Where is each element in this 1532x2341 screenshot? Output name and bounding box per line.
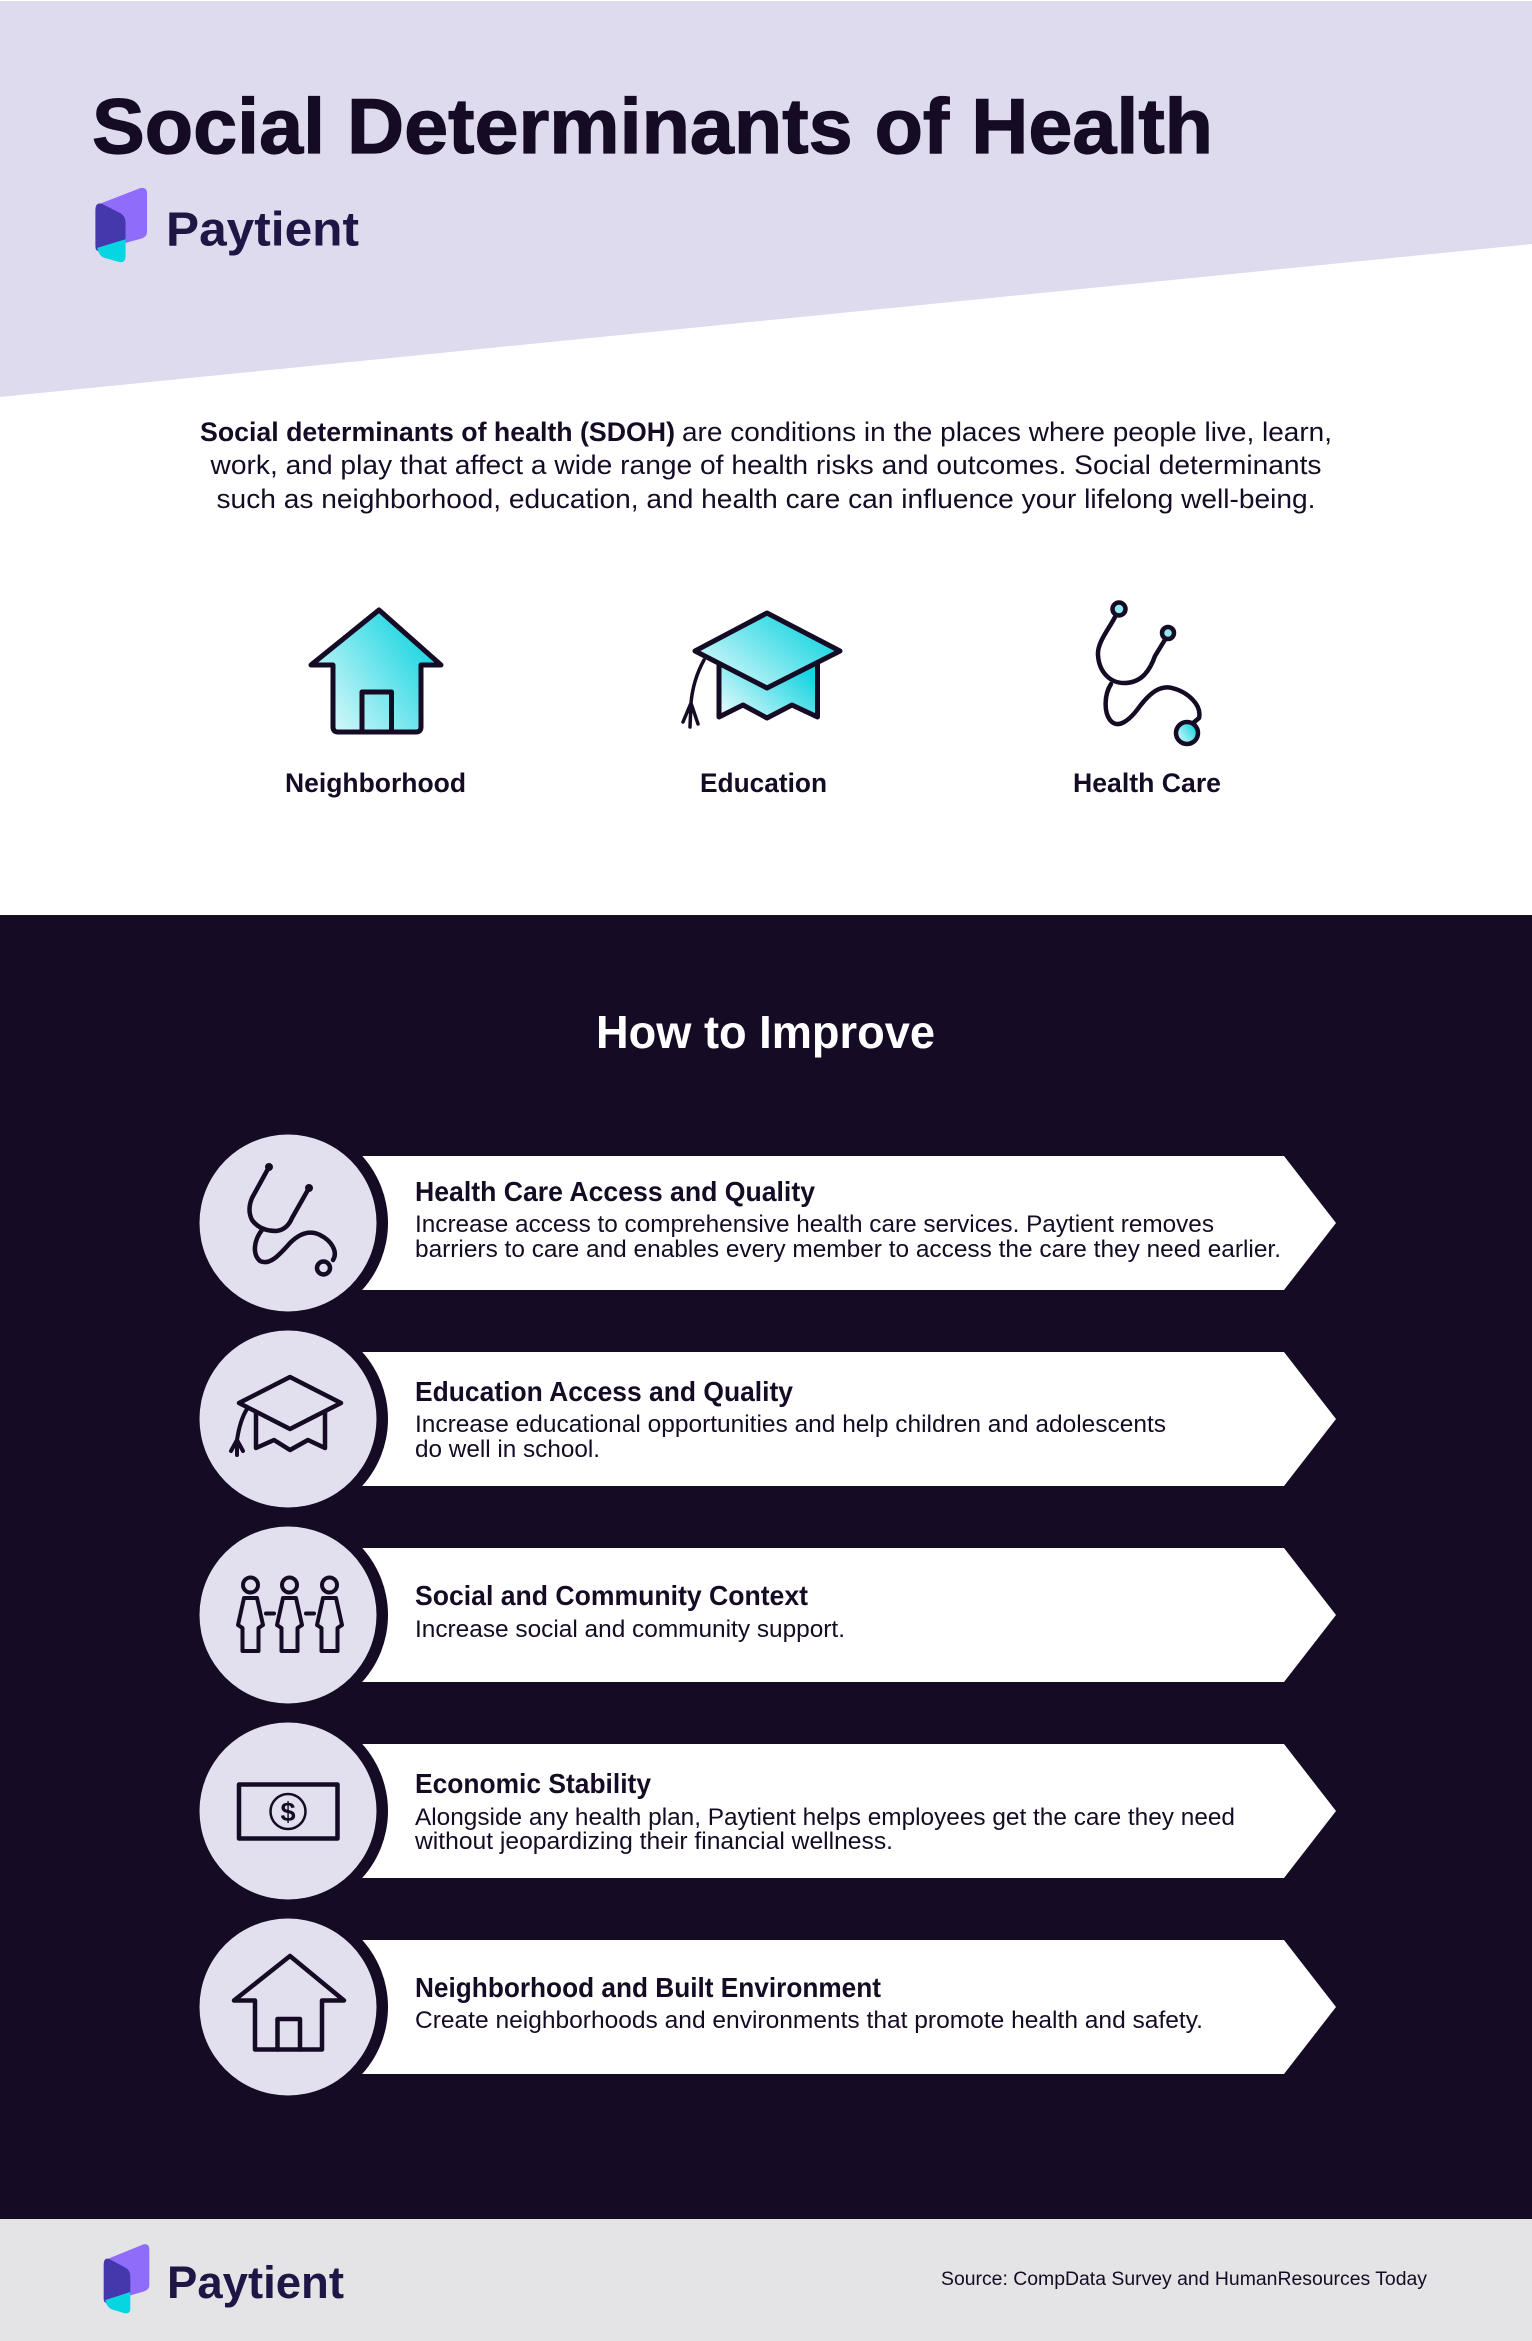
header band bbox=[0, 1, 1532, 397]
icon: three people bbox=[238, 1578, 342, 1651]
arrow banner bbox=[340, 1940, 1336, 2074]
row text: Create neighborhoods and environments that promote health and safety. bbox=[415, 2007, 1203, 2034]
row: economic stability bbox=[188, 1711, 1336, 1911]
icon circle bbox=[200, 1134, 376, 1312]
row text: Increase access to comprehensive health care services. Paytient removes bbox=[415, 1211, 1214, 1238]
icon: house bbox=[311, 610, 441, 732]
logo wordmark: Paytient bbox=[166, 204, 359, 256]
row heading: Social and Community Context bbox=[415, 1580, 808, 1611]
row text: do well in school. bbox=[415, 1436, 600, 1463]
label: Education bbox=[700, 768, 827, 798]
footer bbox=[0, 2219, 1532, 2341]
category: neighborhood bbox=[285, 610, 466, 798]
footer background bbox=[0, 2219, 1532, 2341]
logo wordmark: Paytient bbox=[167, 2257, 344, 2308]
category: education bbox=[683, 613, 840, 798]
title: Social Determinants of Health bbox=[92, 82, 1213, 170]
header logo bbox=[95, 188, 359, 262]
panel: how to improve bbox=[0, 915, 1532, 2219]
category: health care bbox=[1073, 602, 1221, 798]
row text bbox=[415, 1211, 1281, 1263]
ring bbox=[188, 1123, 388, 1323]
row text: without jeopardizing their financial wellness. bbox=[414, 1828, 893, 1855]
row text: barriers to care and enables every member to access the care they need earlier. bbox=[415, 1236, 1281, 1263]
icon: logo mark bbox=[104, 2244, 149, 2313]
intro paragraph bbox=[200, 417, 1332, 514]
row text: Increase social and community support. bbox=[415, 1616, 845, 1643]
intro paragraph: Social determinants of health (SDOH) bbox=[200, 417, 675, 447]
row heading: Health Care Access and Quality bbox=[415, 1176, 815, 1207]
icon circle bbox=[200, 1526, 376, 1704]
row text bbox=[415, 1411, 1166, 1463]
intro paragraph: are conditions in the places where people live, learn, bbox=[682, 417, 1332, 447]
row text: Alongside any health plan, Paytient helps employees get the care they need bbox=[415, 1804, 1235, 1831]
label: Neighborhood bbox=[285, 768, 466, 798]
source note: Source: CompData Survey and HumanResources Today bbox=[941, 2269, 1428, 2290]
icon circle bbox=[200, 1918, 376, 2096]
ring bbox=[188, 1515, 388, 1715]
icon circle bbox=[200, 1330, 376, 1508]
row heading: Education Access and Quality bbox=[415, 1376, 793, 1407]
row: social and community bbox=[188, 1515, 1336, 1715]
row heading: Neighborhood and Built Environment bbox=[415, 1972, 881, 2003]
row text: Increase educational opportunities and help children and adolescents bbox=[415, 1411, 1166, 1438]
row: neighborhood and built environment bbox=[188, 1907, 1336, 2107]
icon: graduation cap bbox=[683, 613, 840, 727]
ring bbox=[188, 1319, 388, 1519]
row: education access bbox=[188, 1319, 1336, 1519]
arrow banner bbox=[340, 1156, 1336, 1290]
ring bbox=[188, 1907, 388, 2107]
arrow banner bbox=[340, 1352, 1336, 1486]
icon: dollar bill bbox=[239, 1784, 338, 1838]
panel background bbox=[0, 915, 1532, 2219]
row: health care access bbox=[188, 1123, 1336, 1323]
arrow banner bbox=[340, 1744, 1336, 1878]
ring bbox=[188, 1711, 388, 1911]
icon: stethoscope bbox=[1098, 602, 1199, 744]
icon: stethoscope bbox=[250, 1163, 335, 1274]
icon circle bbox=[200, 1722, 376, 1900]
heading: How to Improve bbox=[596, 1006, 935, 1058]
icon: graduation cap bbox=[231, 1377, 341, 1455]
arrow banner bbox=[340, 1548, 1336, 1682]
intro paragraph: work, and play that affect a wide range of health risks and outcomes. Social determinants bbox=[209, 450, 1321, 480]
label: Health Care bbox=[1073, 768, 1221, 798]
icon: dollar bill: $ bbox=[280, 1797, 296, 1827]
icon: house bbox=[234, 1956, 344, 2050]
icon: logo mark bbox=[95, 188, 147, 262]
intro paragraph: such as neighborhood, education, and health care can influence your lifelong well-being. bbox=[216, 484, 1316, 514]
row text bbox=[414, 1804, 1235, 1855]
row heading: Economic Stability bbox=[415, 1768, 651, 1799]
